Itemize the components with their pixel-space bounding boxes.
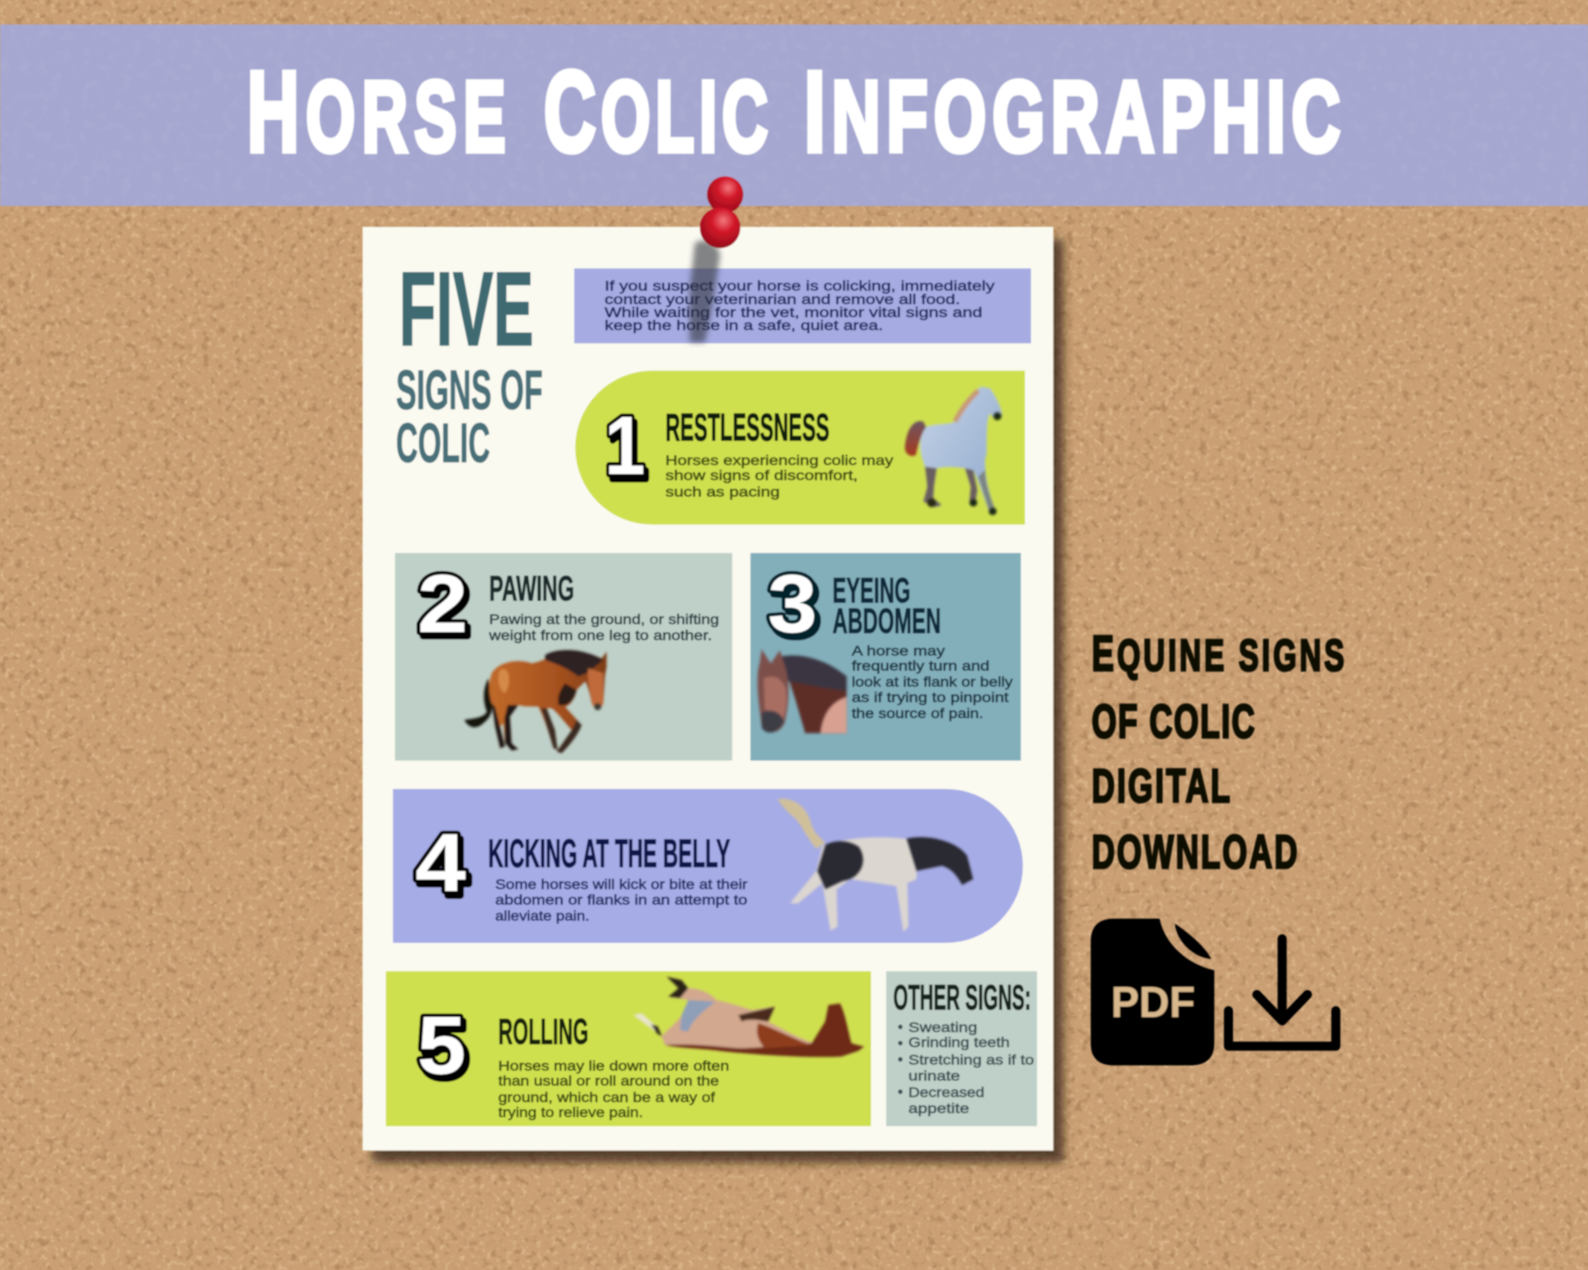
bullet list: Sweating (908, 1020, 977, 1035)
intro text box: While waiting for the vet, monitor vital signs and (605, 305, 982, 321)
icon: pdf file: PDF (1111, 979, 1195, 1027)
description: weight from one leg to another. (488, 628, 712, 643)
side caption: EQUINE SIGNS (1092, 626, 1344, 681)
description: such as pacing (665, 484, 780, 499)
side caption: DIGITAL (1092, 759, 1230, 813)
card 1: restlessness (575, 371, 1025, 525)
title: HORSE (247, 48, 506, 176)
title: INFOGRAPHIC (804, 48, 1340, 176)
icon: grey horse (905, 387, 1002, 515)
intro text box (574, 268, 1031, 343)
icon: pinto horse (778, 799, 973, 932)
paper poster (363, 227, 1053, 1150)
heading: PAWING (489, 569, 574, 609)
icon: pdf file (1091, 919, 1214, 1065)
bullet list: Grinding teeth (908, 1035, 1010, 1050)
number 4: 4 (418, 820, 469, 913)
number 4: 4 (415, 816, 466, 909)
icon: red push pin (700, 176, 743, 248)
bullet list: urinate (908, 1069, 960, 1084)
side caption: OF COLIC (1092, 694, 1255, 748)
description: alleviate pain. (495, 909, 589, 924)
number 2: 2 (417, 557, 468, 650)
card 2: pawing (395, 553, 732, 761)
heading: five signs of colic: COLIC (396, 412, 490, 474)
card 4: kicking at the belly (393, 789, 1023, 943)
bullet list (898, 1020, 1034, 1116)
pin shadow (690, 240, 720, 342)
bullet list: appetite (908, 1101, 969, 1116)
description: look at its flank or belly (852, 675, 1013, 690)
heading: ABDOMEN (832, 601, 941, 641)
side caption: DOWNLOAD (1092, 824, 1297, 879)
description (665, 453, 893, 499)
intro text box: contact your veterinarian and remove all food. (605, 292, 960, 308)
heading: five signs of colic: FIVE (399, 251, 534, 368)
panel: other signs (886, 971, 1037, 1126)
description: Horses may lie down more often (498, 1058, 729, 1073)
description (488, 612, 719, 643)
bullet list: Stretching as if to (908, 1052, 1034, 1067)
intro text box: If you suspect your horse is colicking, immediately (605, 279, 996, 295)
card 3: eyeing abdomen (750, 553, 1021, 761)
card 5: rolling (386, 971, 871, 1126)
icon: download arrow (1228, 939, 1336, 1046)
description: A horse may (852, 643, 945, 658)
description: Pawing at the ground, or shifting (489, 612, 719, 627)
heading: OTHER SIGNS: (893, 978, 1031, 1018)
intro text box: keep the horse in a safe, quiet area. (605, 318, 883, 334)
description: abdomen or flanks in an attempt to (495, 892, 748, 907)
number 5: 5 (417, 999, 466, 1092)
heading: RESTLESSNESS (665, 407, 829, 450)
description: ground, which can be a way of (498, 1090, 715, 1105)
icon: horse head looking at flank (757, 649, 847, 733)
number 1: 1 (605, 399, 645, 492)
description: Some horses will kick or bite at their (495, 877, 748, 892)
heading: EYEING (832, 571, 910, 611)
heading (832, 571, 941, 641)
description: Horses experiencing colic may (665, 453, 893, 468)
number 1: 1 (608, 404, 648, 497)
number 3: 3 (768, 557, 817, 650)
heading: five signs of colic: SIGNS OF (396, 359, 543, 421)
description (498, 1058, 729, 1120)
title: COLIC (544, 48, 768, 176)
title banner (0, 24, 1588, 206)
description: trying to relieve pain. (498, 1105, 643, 1120)
heading: ROLLING (498, 1011, 588, 1052)
description: as if trying to pinpoint (852, 690, 1009, 705)
heading: five signs of colic (396, 251, 543, 474)
number 2: 2 (420, 561, 471, 654)
number 5: 5 (420, 1003, 469, 1096)
icon: rolling horse (633, 977, 864, 1057)
heading: KICKING AT THE BELLY (488, 832, 730, 876)
icon: bay horse (464, 650, 607, 753)
description: the source of pain. (852, 706, 983, 721)
description: show signs of discomfort, (665, 468, 858, 483)
side caption (1092, 626, 1344, 879)
number 3: 3 (771, 561, 820, 654)
title (247, 48, 1340, 176)
bullet list: Decreased (908, 1085, 984, 1100)
description: frequently turn and (852, 658, 989, 673)
description (852, 643, 1013, 721)
description (495, 877, 748, 924)
paper shadow (373, 239, 1063, 1163)
description: than usual or roll around on the (498, 1074, 719, 1089)
